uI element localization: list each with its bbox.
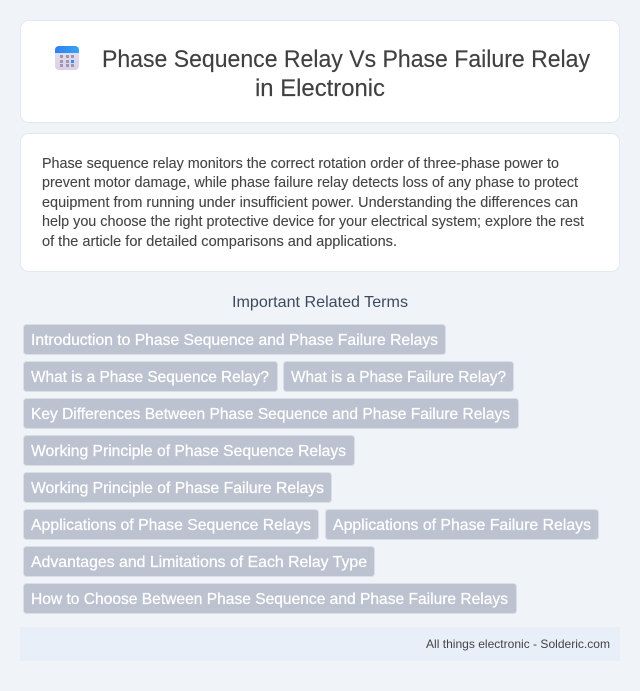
tag: [24, 436, 354, 466]
title: Phase Sequence Relay Vs Phase Failure Relay: [102, 46, 590, 73]
tag: [284, 362, 514, 392]
title: [102, 46, 590, 102]
tag: [24, 546, 374, 576]
tag list: [24, 324, 598, 614]
footer: [20, 627, 620, 661]
tag: Applications of Phase Failure Relays: [333, 517, 591, 534]
tag: Working Principle of Phase Sequence Relays: [31, 443, 346, 460]
panel: summary text: Phase sequence relay monitors the correct rotation order of three-phase power to: [42, 156, 559, 172]
tag: [24, 510, 318, 540]
tag: Advantages and Limitations of Each Relay Type: [31, 554, 367, 571]
footer: All things electronic - Solderic.com: [426, 637, 610, 651]
tag: [24, 472, 332, 502]
tag: [24, 324, 446, 354]
panel: summary text: of the article for detailed comparisons and applications.: [42, 234, 397, 250]
header card: [20, 20, 620, 122]
tag: Key Differences Between Phase Sequence and Phase Failure Relays: [31, 406, 510, 423]
tag: Introduction to Phase Sequence and Phase Failure Relays: [31, 332, 438, 349]
panel: summary text: help you choose the right protective device for your electrical system; explore the rest: [42, 214, 584, 230]
tag: What is a Phase Sequence Relay?: [31, 369, 269, 386]
tag: [24, 398, 518, 428]
panel: summary text: equipment from running under insufficient power. Understanding the differences can: [42, 195, 578, 211]
title: in Electronic: [255, 75, 385, 102]
tag: [24, 584, 516, 614]
heading: important related terms: Important Related Terms: [232, 294, 408, 311]
tag: Applications of Phase Sequence Relays: [31, 517, 311, 534]
panel: summary text: [20, 134, 620, 272]
panel: summary text: prevent motor damage, while phase failure relay detects loss of any phase to protect: [42, 175, 578, 191]
tag: [24, 362, 278, 392]
icon: calendar: [55, 46, 79, 70]
tag: Working Principle of Phase Failure Relays: [31, 480, 324, 497]
tag: [326, 510, 598, 540]
tag: What is a Phase Failure Relay?: [291, 369, 506, 386]
tag: How to Choose Between Phase Sequence and Phase Failure Relays: [31, 591, 508, 608]
